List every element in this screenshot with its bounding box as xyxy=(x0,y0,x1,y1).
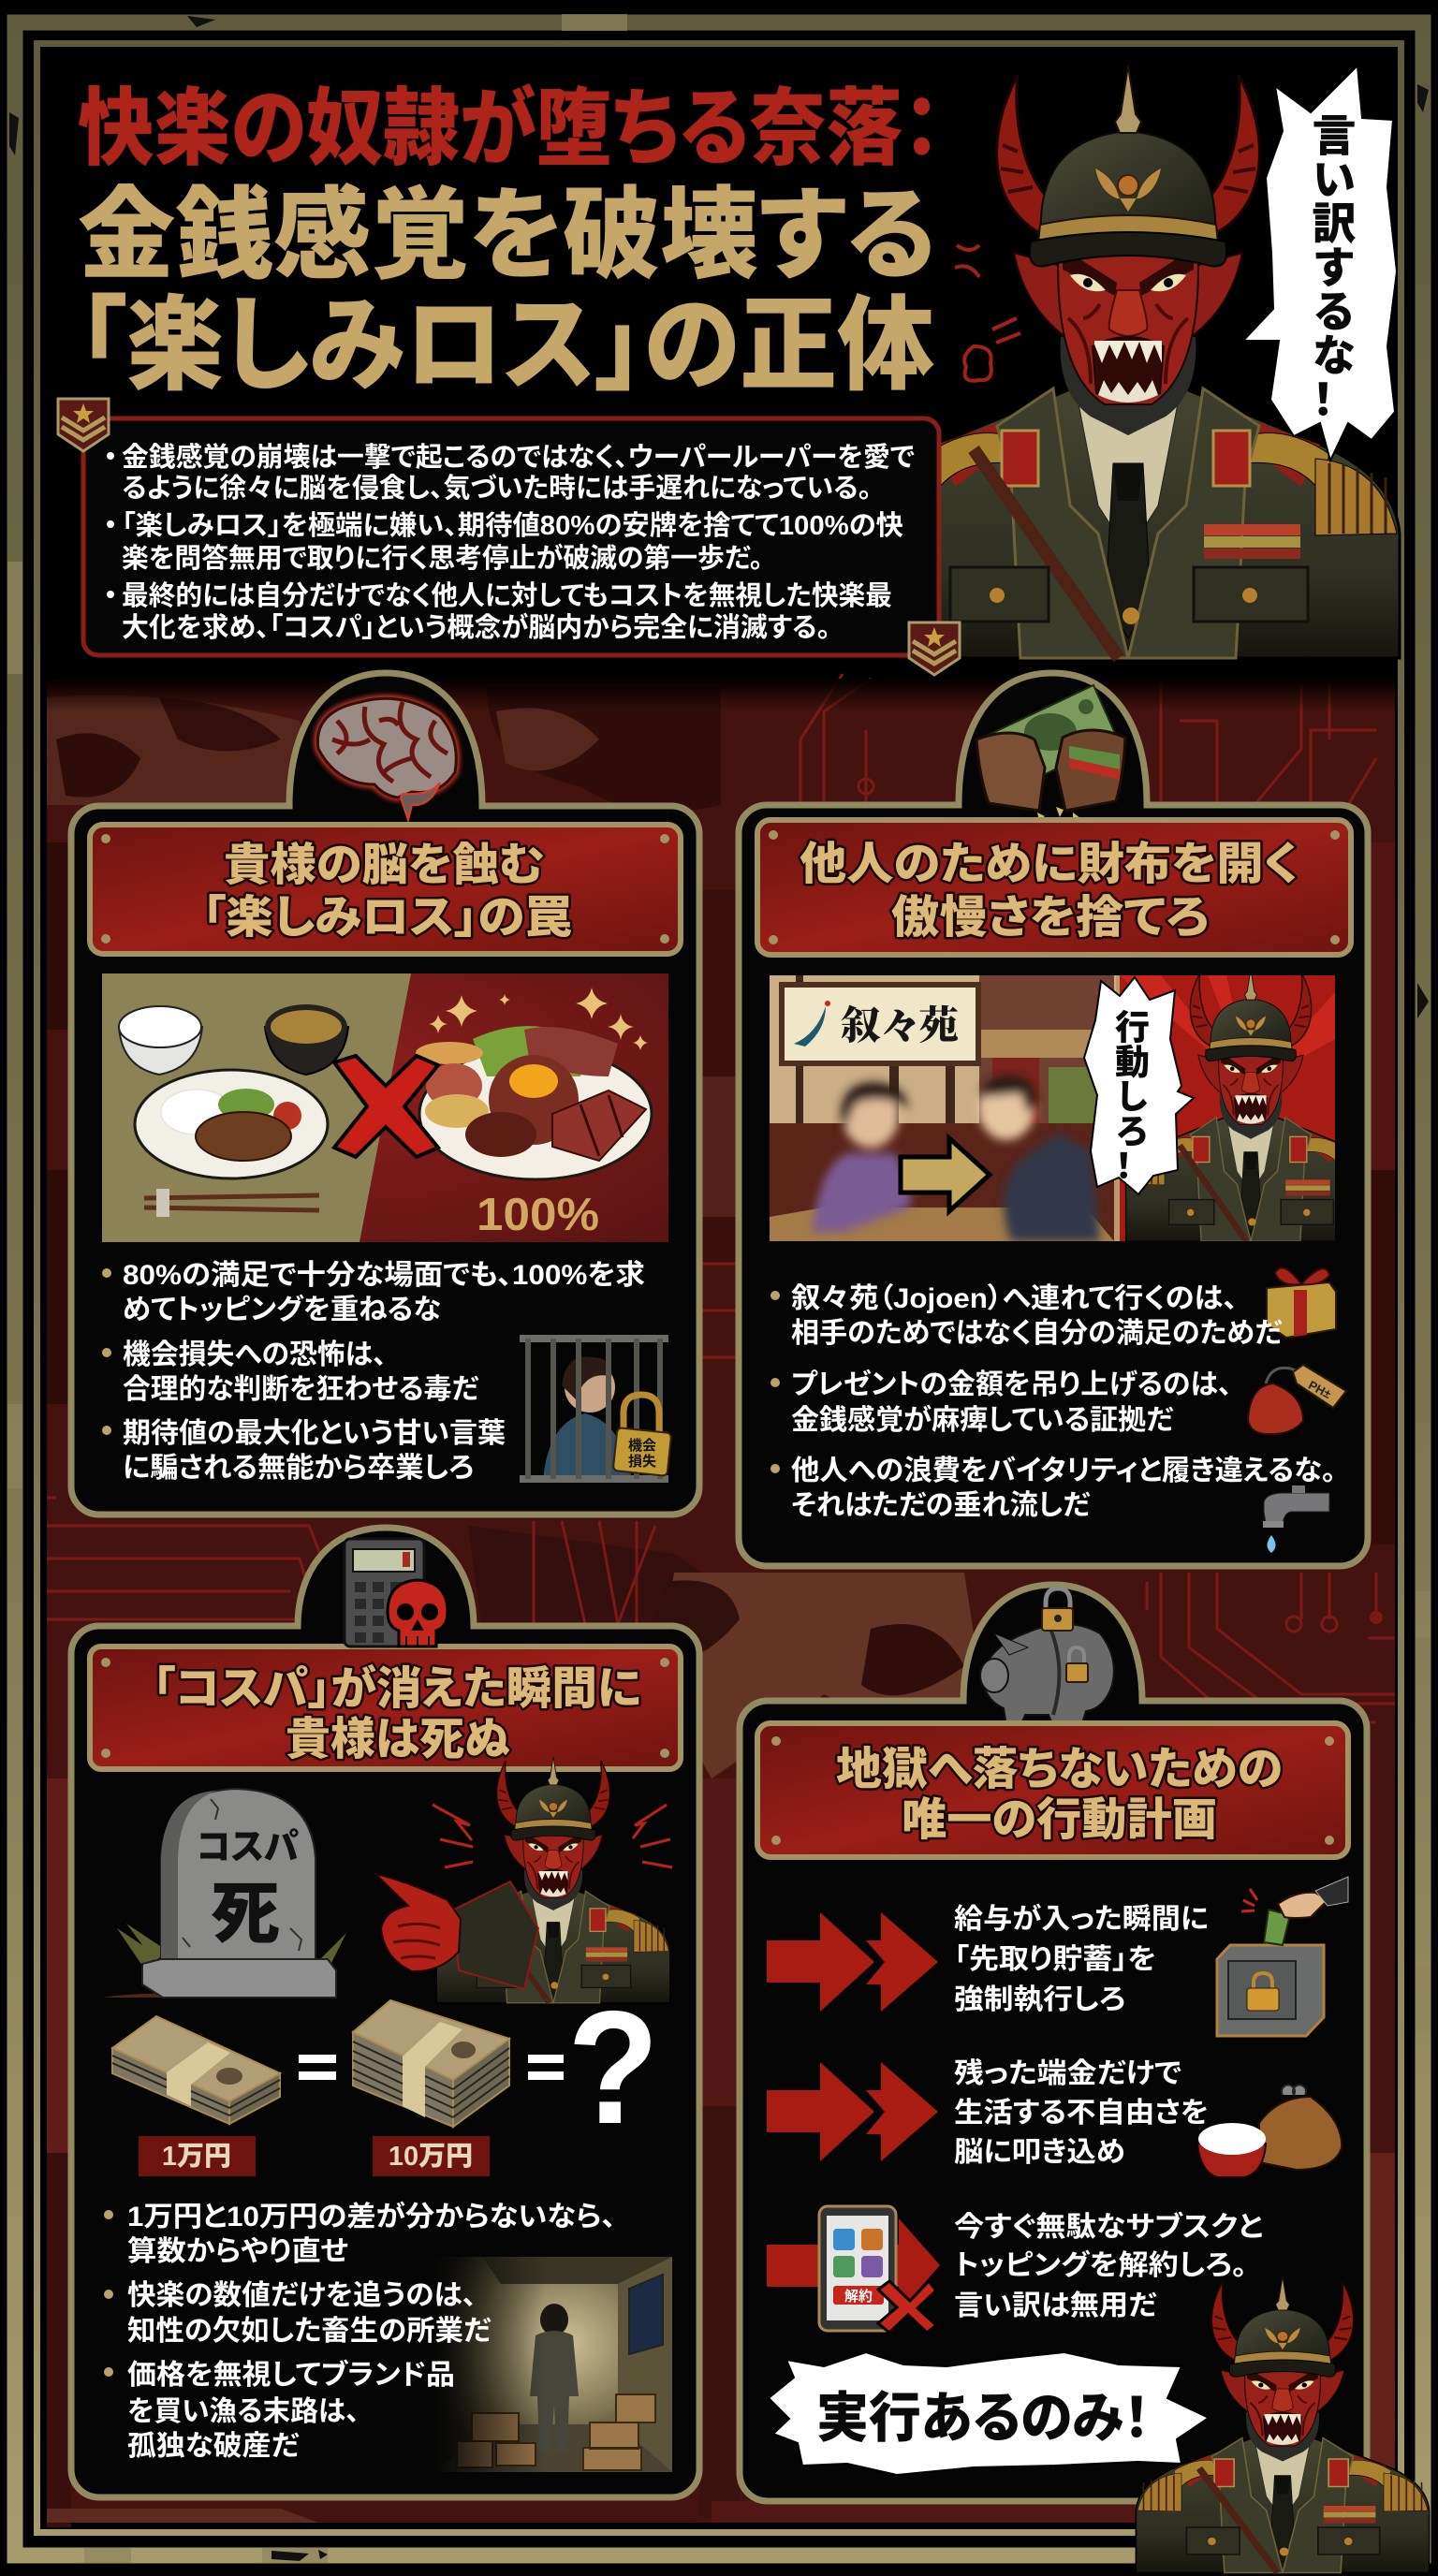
speech burst: 実行あるのみ: 実行あるのみ！ xyxy=(816,2388,1150,2449)
speech bubble: 言い訳するな: 言い訳するな！ xyxy=(1305,112,1356,420)
icon: gift box xyxy=(1267,1268,1336,1338)
bullet list: 叙々苑（Jojoen）へ連れて行くのは、 xyxy=(791,1283,1238,1314)
illustration: money stacks comparison: 10万円 xyxy=(389,2142,473,2172)
icon: coin purse and rice bowl xyxy=(1197,2085,1342,2177)
lower section camouflage and circuit background xyxy=(47,674,1395,2527)
arrow: step 3 xyxy=(767,2218,940,2312)
plaque heading: 貴様は死ぬ xyxy=(286,1715,510,1764)
panel: コスパが消えた瞬間 xyxy=(71,1528,699,2497)
title line 3: 「楽しみロス」の正体 xyxy=(78,288,934,403)
summary panel: 「楽しみロス」を極端に嫌い、期待値80%の安牌を捨てて100%の快 xyxy=(122,510,903,541)
illustration: ruined room with boxes xyxy=(433,2257,672,2472)
icon: brain xyxy=(317,698,456,820)
plaque heading xyxy=(90,825,681,954)
icon: coin purse with tag: PH± xyxy=(1306,1378,1333,1401)
illustration: pointing devil xyxy=(375,1757,672,2003)
step 3 text: 今すぐ無駄なサブスクと xyxy=(954,2211,1263,2243)
bullet list xyxy=(770,1283,1336,1521)
icon: jailed person with lock xyxy=(520,1339,671,1481)
icon: dripping tap xyxy=(1263,1486,1329,1553)
icon: calculator with skull xyxy=(345,1539,448,1647)
arrow: step 1 xyxy=(767,1912,938,2012)
bullet list: それはただの垂れ流しだ xyxy=(791,1490,1090,1521)
bullet list: 1万円と10万円の差が分からないなら、 xyxy=(127,2201,616,2232)
plaque heading xyxy=(757,1723,1348,1857)
illustration: tombstone of cost performance: コスパ xyxy=(197,1828,299,1867)
icon: armored piggy bank with lock xyxy=(980,1588,1114,1726)
step 2 text: 残った端金だけで xyxy=(954,2058,1181,2089)
plaque heading: 傲慢さを捨てろ xyxy=(891,893,1209,943)
arrow: step 2 xyxy=(767,2062,938,2161)
summary panel xyxy=(83,418,939,655)
step 1 text xyxy=(954,1903,1209,2015)
bullet list: プレゼントの金額を吊り上げるのは、 xyxy=(791,1369,1232,1400)
illustration: tombstone of cost performance: 死 xyxy=(211,1877,280,1952)
step 2 text xyxy=(954,2058,1209,2168)
illustration: devil bottom right xyxy=(1136,2276,1430,2572)
bullet list: に騙される無能から卒業しろ xyxy=(123,1453,474,1484)
summary panel: 大化を求め、「コスパ」という概念が脳内から完全に消滅する。 xyxy=(122,611,830,643)
bullet list: 孤独な破産だ xyxy=(127,2431,299,2462)
panel: 楽しみロスの罠 xyxy=(71,673,699,1515)
icon: phone cancelling subscriptions xyxy=(819,2206,936,2333)
bullet list: 金銭感覚が麻痺している証拠だ xyxy=(791,1404,1173,1436)
plaque heading xyxy=(757,820,1351,955)
title line 1: 快楽の奴隷が堕ちる奈落： xyxy=(78,82,941,176)
summary panel: 金銭感覚の崩壊は一撃で起こるのではなく、ウーパールーパーを愛で xyxy=(122,442,915,473)
icon: jailed person with lock: 機会 xyxy=(628,1438,656,1454)
icon: torn wallet with cash xyxy=(976,685,1125,821)
illustration: 80% meal versus 100% meal: 100% xyxy=(477,1190,599,1240)
illustration: main devil general xyxy=(857,66,1400,658)
illustration: Jojoen restaurant scene with devil: 叙々苑 xyxy=(841,1004,959,1048)
title line 2: 金銭感覚を破壊する xyxy=(78,179,936,291)
plaque heading xyxy=(90,1647,681,1769)
bullet list: 機会損失への恐怖は、 xyxy=(123,1339,387,1370)
summary panel: 楽を問答無用で取りに行く思考停止が破滅の第一歩だ。 xyxy=(122,542,763,574)
bullet list: 価格を無視してブランド品 xyxy=(127,2359,455,2391)
bullet list xyxy=(104,2201,616,2462)
bullet list: めてトッピングを重ねるな xyxy=(123,1295,441,1325)
plaque heading: 貴様の脳を蝕む xyxy=(224,841,545,890)
summary panel: るように徐々に脳を侵食し、気づいた時には手遅れになっている。 xyxy=(122,473,872,504)
bullet list: 80%の満足で十分な場面でも、100%を求 xyxy=(123,1260,645,1291)
anger marks xyxy=(955,245,1020,381)
illustration: Jojoen restaurant scene with devil: 行動しろ！ xyxy=(1110,1009,1150,1182)
step 2 text: 生活する不自由さを xyxy=(954,2098,1209,2129)
plaque heading: 唯一の行動計画 xyxy=(902,1795,1217,1845)
speech burst: 実行あるのみ xyxy=(769,2352,1209,2475)
bullet list: 算数からやり直せ xyxy=(127,2236,348,2267)
illustration: money stacks comparison xyxy=(112,1978,659,2176)
illustration: tombstone of cost performance xyxy=(103,1789,346,1998)
step 2 text: 脳に叩き込め xyxy=(954,2137,1125,2168)
bullet list: 期待値の最大化という甘い言葉 xyxy=(123,1418,506,1449)
speech bubble: 言い訳するな xyxy=(1243,66,1397,461)
plaque heading: 地獄へ落ちないための xyxy=(836,1745,1283,1794)
icon: coin purse with tag xyxy=(1248,1365,1346,1434)
bullet list: 相手のためではなく自分の満足のためだ xyxy=(791,1318,1282,1349)
icon: jailed person with lock: 損失 xyxy=(628,1453,656,1470)
plaque heading: 「コスパ」が消えた瞬間に xyxy=(153,1663,641,1714)
illustration: 80% meal versus 100% meal xyxy=(102,973,668,1242)
illustration: money stacks comparison: ? xyxy=(567,1978,659,2158)
bullet list xyxy=(102,1260,645,1484)
icon: rank badge bottom xyxy=(909,622,960,675)
icon: safe with hand depositing cash xyxy=(1217,1877,1348,2036)
bullet list: 快楽の数値だけを追うのは、 xyxy=(127,2280,477,2311)
icon: rank badge top xyxy=(58,399,109,451)
illustration: money stacks comparison: 1万円 xyxy=(162,2142,231,2172)
panel: 唯一の行動計画 xyxy=(740,1585,1367,2501)
bullet list: 知性の欠如した畜生の所業だ xyxy=(127,2316,491,2347)
icon: phone cancelling subscriptions: 解約 xyxy=(844,2289,873,2305)
step 1 text: 強制執行しろ xyxy=(954,1984,1125,2015)
bullet list: 他人への浪費をバイタリティと履き違えるな。 xyxy=(791,1456,1336,1486)
plaque heading: 他人のために財布を開く xyxy=(800,840,1299,889)
bullet list: を買い漁る末路は、 xyxy=(127,2396,360,2427)
step 1 text: 「先取り貯蓄」を xyxy=(954,1944,1156,1975)
panel: 財布を開く傲慢さ xyxy=(739,673,1375,1566)
illustration: Jojoen restaurant scene with devil xyxy=(770,969,1375,1241)
step 3 text xyxy=(954,2211,1263,2321)
step 3 text: 言い訳は無用だ xyxy=(954,2291,1156,2321)
step 3 text: トッピングを解約しろ。 xyxy=(954,2250,1247,2281)
step 1 text: 給与が入った瞬間に xyxy=(954,1903,1209,1935)
plaque heading: 「楽しみロス」の罠 xyxy=(202,893,572,943)
bullet list: 合理的な判断を狂わせる毒だ xyxy=(123,1374,478,1405)
summary panel: 最終的には自分だけでなく他人に対してもコストを無視した快楽最 xyxy=(122,580,892,611)
